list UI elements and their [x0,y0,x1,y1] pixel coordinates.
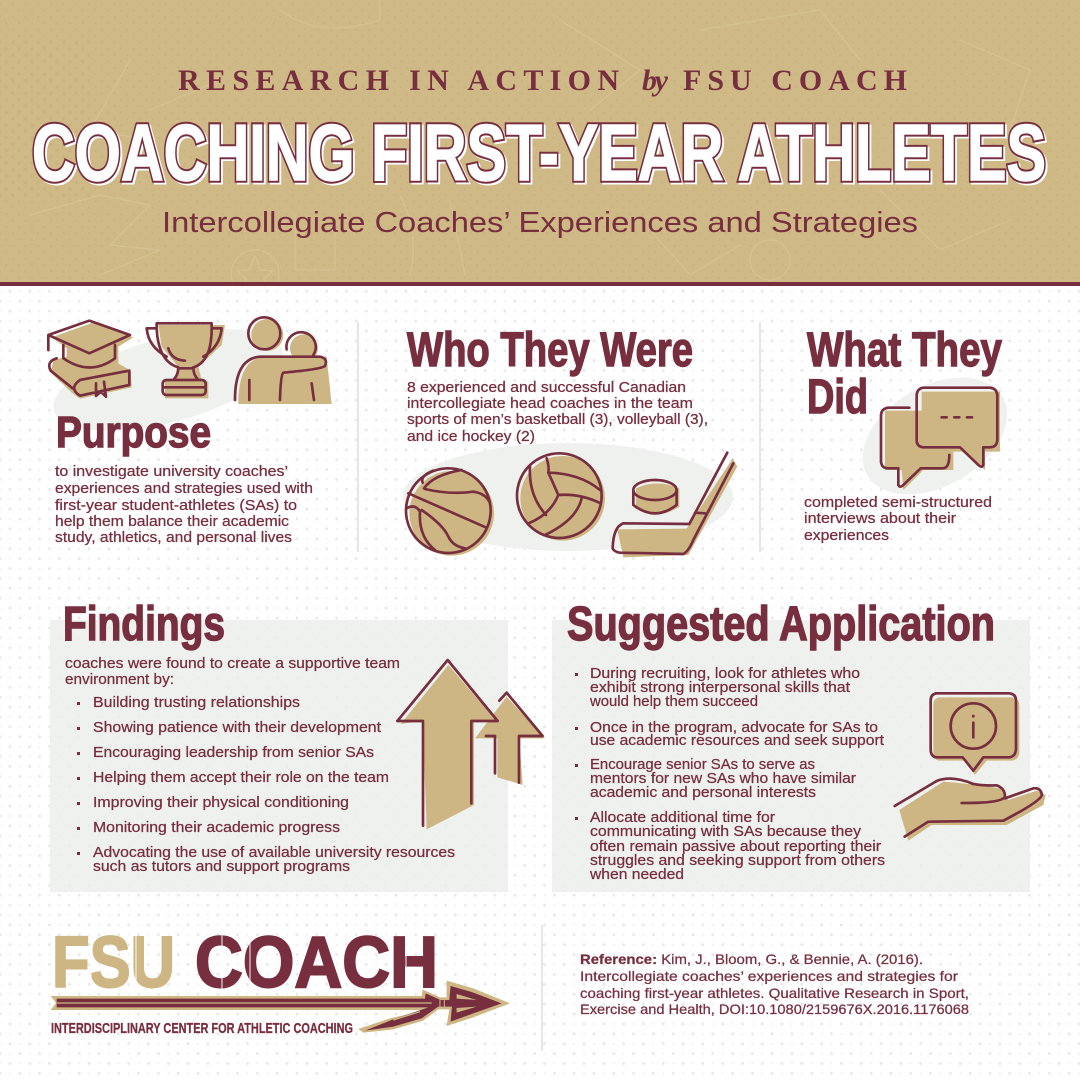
panel: suggested application [552,598,1046,892]
findings list: Building trusting relationships [93,695,300,711]
findings list [77,695,455,875]
logo: FSU Coach: FSU [52,923,175,1003]
arrow with spearhead [51,981,510,1033]
logo tagline: INTERDISCIPLINARY CENTER FOR ATHLETIC COACHING [51,1021,353,1037]
icon: information bubble over open hand [895,693,1046,841]
who they were text: intercollegiate head coaches in the team [407,396,693,412]
icon: speech bubbles [842,354,1028,518]
application list: Once in the program, advocate for SAs to [590,720,878,736]
application list: Allocate additional time for [590,810,775,826]
heading: what they did: What They [807,324,1002,377]
application list: communicating with SAs because they [590,824,862,840]
who they were text [407,380,708,445]
application list: often remain passive about reporting their [590,839,881,855]
findings list: Encouraging leadership from senior SAs [93,745,374,761]
purpose text: help them balance their academic [55,514,289,530]
purpose text: to investigate university coaches’ [55,464,288,480]
who they were text: sports of men’s basketball (3), volleyball (3), [407,412,708,428]
logo: FSU Coach [51,923,510,1037]
purpose text: experiences and strategies used with [55,481,313,497]
findings list: Showing patience with their development [93,720,381,736]
panel: findings [50,598,545,892]
application list: mentors for new SAs who have similar [590,771,856,787]
header banner [0,0,1080,298]
subtitle: Intercollegiate Coaches’ Experiences and Strategies [162,207,918,239]
panel: who they were [403,324,737,557]
application list: struggles and seeking support from others [590,853,885,869]
panel: what they did [804,324,1028,544]
what they did text: interviews about their [804,511,956,527]
eyebrow heading: FSU COACH [683,64,907,97]
eyebrow heading: RESEARCH IN ACTION [178,64,619,97]
heading: who they were: Who They Were [407,324,693,377]
findings intro [65,656,400,688]
heading: purpose: Purpose [56,408,211,457]
icon: volleyball [517,453,605,541]
reference citation: Reference: Kim, J., Bloom, G., & Bennie, A. (2016). [580,951,923,967]
application list [575,666,885,883]
icon: two people embracing [235,317,332,404]
icon: upward arrows [397,660,545,829]
reference citation: coaching first-year athletes. Qualitative Research in Sport, [580,985,969,1001]
application list: exhibit strong interpersonal skills that [590,680,850,696]
purpose text [55,464,313,546]
what they did text: experiences [804,528,889,544]
purpose text: study, athletics, and personal lives [55,530,292,546]
findings list: such as tutors and support programs [93,859,350,875]
icon: hockey puck and stick [613,453,737,557]
reference citation: Intercollegiate coaches’ experiences and strategies for [580,968,958,984]
panel: what they did: Did [807,371,868,424]
logo: FSU Coach: COACH [195,923,438,1003]
who they were text: 8 experienced and successful Canadian [407,380,686,396]
application list: when needed [589,867,684,883]
what they did text: completed semi-structured [804,495,992,511]
reference citation [580,951,969,1017]
icon: basketball [406,468,494,556]
heading: findings: Findings [63,598,225,651]
heading: suggested application: Suggested Application [567,598,995,651]
findings list: Helping them accept their role on the team [93,770,389,786]
panel: purpose [43,309,332,546]
icon: graduation cap and book [48,321,133,399]
findings list: Advocating the use of available university resources [93,845,455,861]
findings intro: environment by: [65,672,174,688]
application list: would help them succeed [589,694,758,710]
what they did text [804,495,992,544]
purpose text: first-year student-athletes (SAs) to [55,498,297,514]
findings intro: coaches were found to create a supportive team [65,656,400,672]
reference citation: Exercise and Health, DOI:10.1080/2159676X.2016.1176068 [580,1001,969,1017]
findings list: Monitoring their academic progress [93,820,340,836]
application list: Encourage senior SAs to serve as [590,757,815,773]
findings list: Improving their physical conditioning [93,795,349,811]
who they were text: and ice hockey (2) [407,429,535,445]
application list: academic and personal interests [590,785,816,801]
icon: trophy [147,323,225,398]
application list: During recruiting, look for athletes who [590,666,860,682]
eyebrow heading: by [642,64,669,97]
application list: use academic resources and seek support [590,733,884,749]
